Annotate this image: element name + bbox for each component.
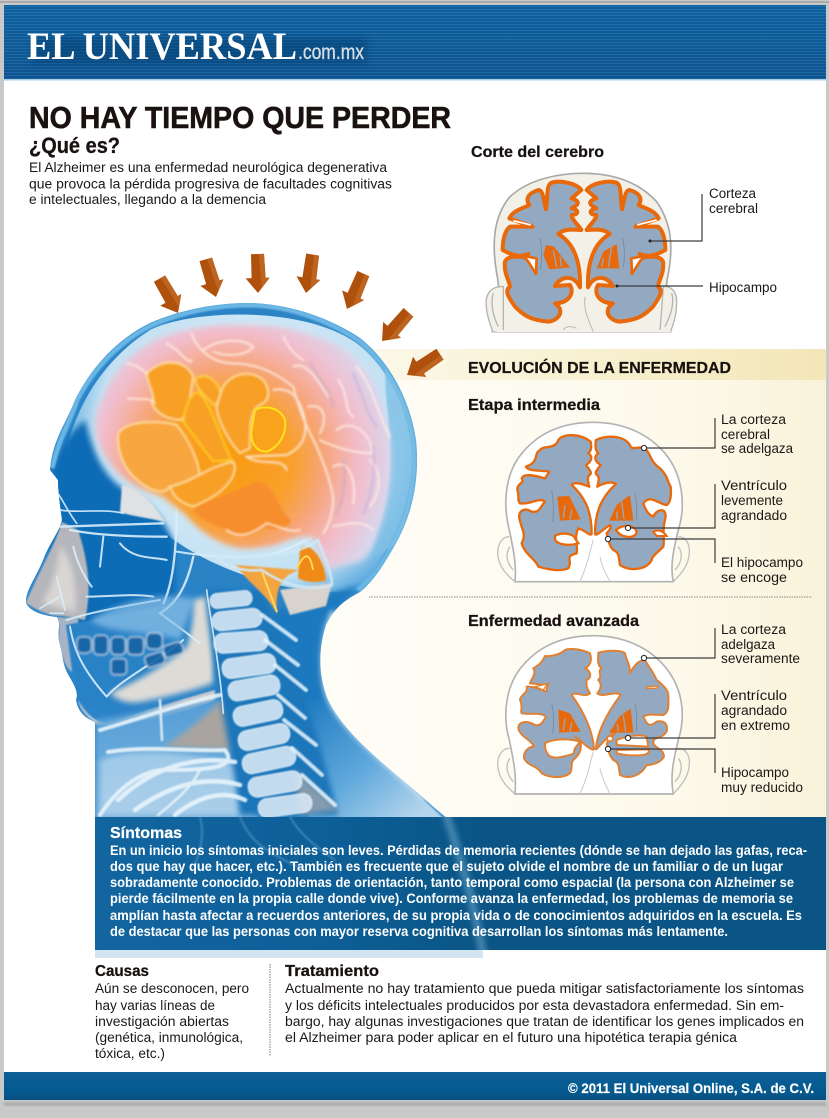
sintomas body text: de destacar que las personas con mayor reserva cognitiva desarrollan los síntomas más lentamente. <box>110 924 728 939</box>
lavender shadow folds <box>310 363 377 513</box>
forehead pale bone patch <box>120 485 165 522</box>
block: causas: hay varias líneas de <box>95 998 215 1013</box>
intro text <box>29 160 392 207</box>
arrow 2 <box>194 256 228 300</box>
neck beige lower <box>295 770 340 815</box>
back neck lower tone <box>308 700 443 817</box>
pale chest wash <box>100 752 240 815</box>
orange lobes <box>118 362 268 507</box>
callout: la corteza cerebral se adelgaza: se adelgaza <box>721 441 793 456</box>
block: tratamiento: bargo, hay algunas investigaciones que tratan de identificar los genes implicados en <box>285 1014 804 1029</box>
intro text: e intelectuales, llegando a la demencia <box>29 192 266 207</box>
block: tratamiento: el Alzheimer para poder aplicar en el futuro una hipotética terapia génica <box>285 1030 738 1045</box>
callout: el hipocampo se encoge: El hipocampo <box>721 555 803 570</box>
callout: corteza cerebral <box>648 186 758 242</box>
block: causas: tóxica, etc.) <box>95 1046 165 1061</box>
callout: la corteza cerebral se adelgaza <box>641 412 793 456</box>
pale wash over eye socket <box>90 596 195 640</box>
callout: la corteza cerebral se adelgaza: La corteza <box>721 412 786 427</box>
callout: ventriculo agrandado en extremo: en extremo <box>721 718 790 733</box>
logo: EL UNIVERSAL <box>27 25 297 68</box>
block: causas: Causas <box>95 963 149 980</box>
chin band <box>78 690 215 725</box>
callout: hipocampo muy reducido: Hipocampo <box>721 765 789 780</box>
heading: corte del cerebro: Corte del cerebro <box>471 144 604 161</box>
arrow 1 <box>149 273 188 319</box>
callout: la corteza adelgaza severamente: adelgaza <box>721 637 775 652</box>
callout: ventriculo levemente agrandado <box>625 478 787 531</box>
callout: ventriculo levemente agrandado: agrandado <box>721 508 787 523</box>
spine dark backing <box>205 590 338 815</box>
arrow 6 <box>373 304 417 349</box>
head silhouette and interior <box>26 303 446 817</box>
sintomas heading: Síntomas <box>110 825 182 842</box>
lateral sulci <box>523 256 537 274</box>
block: tratamiento: Actualmente no hay tratamiento que pueda mitigar satisfactoriamente los síntomas <box>285 981 804 996</box>
callout: el hipocampo se encoge: se encoge <box>721 570 787 585</box>
logo shadow <box>32 38 367 64</box>
white glow of neck edge <box>325 612 426 798</box>
footer bar <box>4 1072 826 1100</box>
back skull band <box>373 370 415 550</box>
mouth and jaw blue <box>65 606 176 701</box>
callout: hipocampo muy reducido: muy reducido <box>721 780 803 795</box>
callout: ventriculo agrandado en extremo: agrandado <box>721 703 787 718</box>
sintomas body text: En un inicio los síntomas iniciales son leves. Pérdidas de memoria recientes (dónde se han dejado las gafas, reca- <box>110 843 807 858</box>
block: causas <box>95 963 249 1061</box>
title: NO HAY TIEMPO QUE PERDER <box>29 100 451 135</box>
copyright: © 2011 El Universal Online, S.A. de C.V. <box>568 1080 814 1096</box>
block: causas: (genética, inmunológica, <box>95 1030 243 1045</box>
spinous processes <box>262 615 335 805</box>
block: tratamiento: Tratamiento <box>285 963 379 980</box>
intro text: El Alzheimer es una enfermedad neurológica degenerativa <box>29 160 387 175</box>
nape deep blue <box>275 582 360 700</box>
callout: hipocampo muy reducido <box>605 746 803 795</box>
callout: ventriculo agrandado en extremo <box>625 688 790 741</box>
callout: corteza cerebral: Corteza <box>709 186 756 201</box>
callout: hipocampo: Hipocampo <box>709 280 777 295</box>
sintomas body text: sobradamente conocido. Problemas de orientación, tanto temporal como espacial (la persona con Alzheimer se <box>110 875 794 890</box>
illustration: transparent head with brain <box>26 303 446 817</box>
lips <box>57 617 82 672</box>
jaw beige <box>110 595 214 703</box>
callout: ventriculo levemente agrandado: Ventrículo <box>721 478 787 493</box>
arrow 3 <box>245 254 270 293</box>
throat beige <box>163 700 240 750</box>
yellow box lobe <box>251 407 285 452</box>
callout: hipocampo <box>616 280 777 295</box>
callout: ventriculo agrandado en extremo: Ventrículo <box>721 688 787 703</box>
diagram: advanced stage brain <box>498 636 689 794</box>
callout: corteza cerebral: cerebral <box>709 201 758 216</box>
brain mass <box>95 325 391 570</box>
callout: la corteza adelgaza severamente <box>641 622 800 666</box>
face skin: nose <box>26 522 89 620</box>
logo: .com.mx <box>298 41 364 64</box>
skull dome <box>62 315 412 592</box>
arrows pointing to the head <box>149 253 446 385</box>
diagram: healthy brain section <box>486 173 677 332</box>
arrow 5 <box>336 268 374 314</box>
vertebrae <box>209 590 313 819</box>
callout: ventriculo levemente agrandado: levemente <box>721 493 783 508</box>
sintomas body text: dos que hay que hacer, etc.). También es frecuente que el sujeto olvide el nombre de un familiar o de un lugar <box>110 859 784 874</box>
pale fold outlines <box>127 333 390 535</box>
sintomas body text <box>110 843 807 939</box>
block: causas: investigación abiertas <box>95 1014 229 1029</box>
ribs and clavicle <box>100 695 245 815</box>
teeth <box>77 633 185 675</box>
facial bones <box>40 487 320 713</box>
arrow 7 <box>400 344 446 385</box>
brain fold lines <box>118 333 390 536</box>
block: tratamiento: y los déficits intelectuales producidos por esta devastadora enfermedad. Sin em- <box>285 998 784 1013</box>
sintomas body text: amplían hasta afectar a recuerdos anteriores, de su propia vida o de conocimientos adquiridos en la escuela. Es <box>110 908 802 923</box>
block: tratamiento <box>285 963 804 1045</box>
arrow 4 <box>294 253 324 295</box>
forehead deep blue <box>50 420 175 640</box>
lower orange <box>193 482 291 536</box>
heading: etapa intermedia: Etapa intermedia <box>468 397 600 414</box>
intro text: que provoca la pérdida progresiva de facultades cognitivas <box>29 176 392 192</box>
heading: enfermedad avanzada: Enfermedad avanzada <box>468 613 639 630</box>
cream section background <box>300 349 826 817</box>
brain <box>95 325 391 570</box>
subtitle: que es: ¿Qué es? <box>29 133 120 158</box>
callout: la corteza adelgaza severamente: severamente <box>721 651 800 666</box>
panel: sintomas <box>95 815 826 958</box>
heading: evolucion de la enfermedad: EVOLUCIÓN DE LA ENFERMEDAD <box>468 358 731 377</box>
chest lower <box>95 695 260 830</box>
ghost anatomy through panel <box>195 815 483 955</box>
callout: la corteza cerebral se adelgaza: cerebral <box>721 427 770 442</box>
header banner <box>4 5 826 80</box>
skull rim <box>52 305 415 590</box>
sintomas body text: pierde fácilmente en la propia calle donde vive). Conforme avanza la enfermedad, los problemas de memoria se <box>110 891 793 906</box>
skin under skull <box>280 583 332 615</box>
callout: el hipocampo se encoge <box>605 536 803 585</box>
cerebellum orange fan <box>215 540 332 614</box>
callout: la corteza adelgaza severamente: La corteza <box>721 622 786 637</box>
diagram: intermediate stage brain <box>498 422 689 582</box>
block: causas: Aún se desconocen, pero <box>95 981 249 996</box>
